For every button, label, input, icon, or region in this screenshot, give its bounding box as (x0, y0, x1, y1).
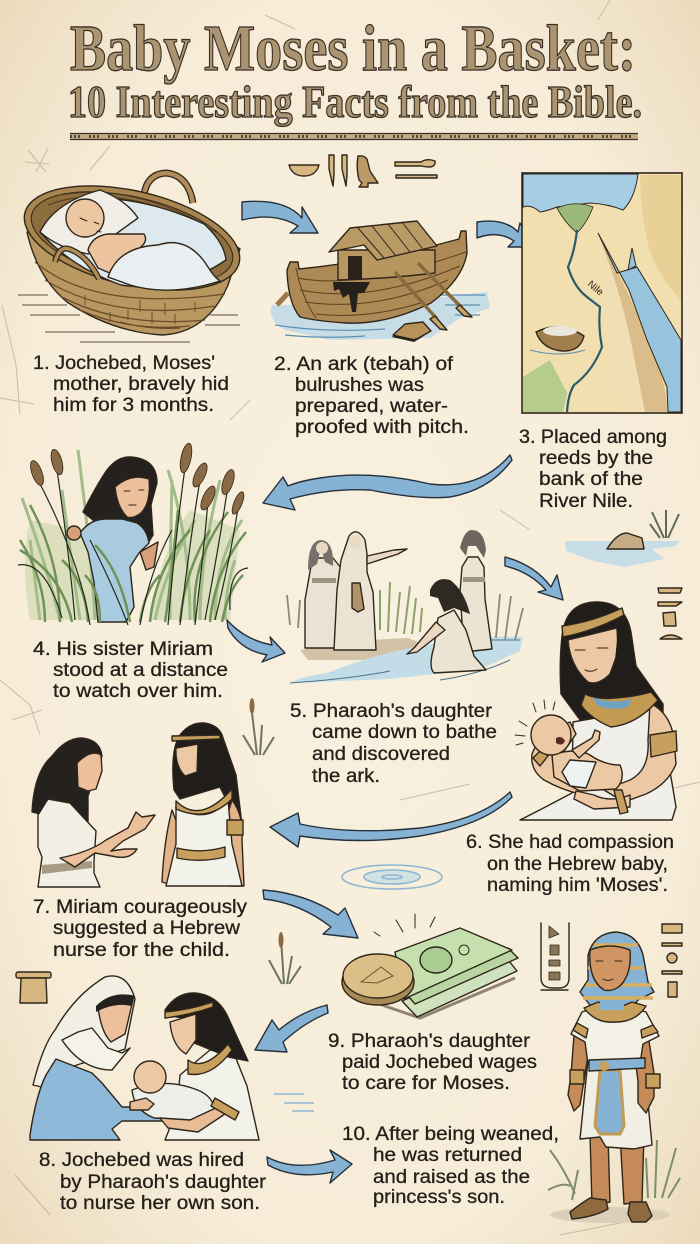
panel: Miriam and princess talking (32, 723, 244, 887)
caption 5: 5. Pharaoh's daughter (290, 701, 493, 722)
baby wrap (562, 760, 596, 788)
icon: temple glyph (16, 972, 51, 1003)
caption 9 (328, 1031, 537, 1094)
back oar (277, 293, 288, 305)
bracelet left (533, 750, 548, 766)
rays (374, 914, 435, 936)
panel: map of the Nile (522, 173, 682, 413)
bracelet right (614, 790, 628, 814)
arrow 6 to 7 (270, 792, 512, 847)
cry marks (515, 700, 555, 745)
long arrow 3 to 4 (263, 455, 512, 510)
headband (172, 735, 220, 741)
caption 8: by Pharaoh's daughter (60, 1172, 267, 1193)
caption 10: he was returned (373, 1145, 522, 1166)
caption 8 (39, 1150, 267, 1214)
caption 3: bank of the (539, 469, 643, 490)
headband (562, 608, 624, 637)
baby raised arm (572, 730, 600, 758)
sleeve trim (573, 1023, 658, 1038)
caption 1: him for 3 months. (53, 395, 214, 416)
caption 10: 10. After being weaned, (342, 1124, 559, 1145)
river Nile (567, 230, 602, 412)
collar (188, 1044, 232, 1074)
ground (550, 1207, 670, 1223)
map sheet (522, 173, 682, 413)
caption 9: paid Jochebed wages (342, 1052, 537, 1073)
arm band (650, 731, 677, 757)
ark hull (287, 231, 467, 323)
arrow 7 to 9 (263, 890, 358, 938)
baby head (134, 1061, 166, 1093)
caption 1: mother, bravely hid (53, 374, 229, 395)
arrow 9 to 8 (255, 1005, 328, 1052)
reed mass tint (25, 510, 240, 620)
blades back (22, 450, 242, 620)
panel: map of the Nile: Nile (585, 279, 606, 299)
belt (177, 847, 225, 860)
legs (590, 1135, 644, 1205)
caption 7: suggested a Hebrew (53, 918, 240, 939)
princess face (176, 744, 198, 776)
green land (523, 360, 567, 412)
baby body (552, 751, 622, 791)
pillow (40, 190, 138, 254)
forearm (574, 791, 630, 809)
cattails (28, 442, 246, 516)
princess dress (165, 1050, 259, 1140)
panel: basket with baby (14, 167, 250, 342)
icon: cartouche (541, 923, 569, 990)
Miriam tunic (38, 799, 100, 887)
small reed tuft (243, 698, 274, 755)
left arm (532, 722, 588, 794)
caption tuft (269, 932, 301, 984)
panel: young Moses (548, 932, 680, 1223)
dress (520, 707, 676, 820)
hieroglyphs right of princess (658, 588, 682, 639)
Miriam face (77, 753, 102, 791)
back reeds grey (287, 594, 523, 640)
basket rim (14, 167, 250, 309)
thatched roof (329, 221, 437, 260)
caption 9: to care for Moses. (342, 1073, 510, 1094)
princess pointing (334, 532, 407, 650)
water ripples (342, 865, 442, 889)
hands (130, 1098, 228, 1132)
basket back handle (144, 173, 193, 203)
caption 8: 8. Jochebed was hired (39, 1150, 244, 1171)
caption 2: 2. An ark (tebah) of (274, 354, 454, 375)
nemes headdress (580, 932, 654, 1010)
hair (560, 602, 663, 724)
caption 6: on the Hebrew baby, (487, 854, 668, 875)
blue panel (595, 1070, 624, 1134)
panel: Pharaoh's daughter at river (287, 530, 523, 683)
caption 9: 9. Pharaoh's daughter (328, 1031, 531, 1052)
princess face (170, 1014, 196, 1054)
title (68, 12, 642, 127)
small reeds and stone (565, 510, 680, 567)
arrow 1 to 2 (242, 201, 318, 233)
icon: hieroglyph column (662, 924, 682, 997)
small basket on map (536, 327, 584, 351)
hair fringe (111, 461, 151, 485)
divider band (70, 133, 638, 140)
panel: coins and money (342, 914, 518, 1018)
caption 8: to nurse her own son. (60, 1193, 260, 1214)
caption 10 (342, 1124, 559, 1208)
shadow (345, 978, 515, 1018)
caption 5: and discovered (312, 744, 450, 765)
caption 2 (274, 354, 469, 438)
eastern desert shade (600, 240, 668, 412)
baby face (66, 199, 104, 237)
caption 4: stood at a distance (53, 660, 228, 681)
Jochebed hair and face (98, 998, 133, 1042)
arrow 5 to 6 (505, 557, 563, 600)
arms (568, 1035, 654, 1113)
arrow 2 to 3 (477, 221, 535, 247)
arrow 4 to 5 (227, 620, 285, 662)
caption 7 (33, 897, 248, 961)
fringe and hair right (564, 618, 624, 670)
caption 5 (290, 701, 497, 787)
princess dress (166, 800, 242, 886)
sleeve trim (211, 1098, 239, 1120)
panel: Miriam among reeds (18, 442, 248, 625)
green reeds (370, 582, 422, 634)
headband (165, 1002, 213, 1018)
coin (342, 959, 414, 1005)
hut walls (338, 250, 435, 280)
Jochebed robe (30, 1059, 162, 1140)
water (271, 292, 490, 340)
maid right (460, 530, 492, 652)
Miriam arms and hands (60, 812, 155, 867)
arm band (227, 820, 243, 835)
river (290, 637, 523, 683)
dress (80, 519, 149, 622)
kilt (580, 1060, 652, 1149)
baby body (88, 234, 146, 274)
caption 1 (33, 353, 229, 416)
face (568, 628, 618, 683)
caption 2: proofed with pitch. (295, 417, 469, 438)
caption 5: the ark. (312, 766, 380, 787)
panel: ark of bulrushes (271, 221, 490, 342)
face (590, 946, 630, 990)
arrow 8 to 10 (267, 1150, 352, 1183)
Jochebed veil back (33, 976, 135, 1089)
caption 3 (519, 427, 667, 512)
caption 10: princess's son. (373, 1187, 505, 1208)
bill lower (402, 956, 517, 1017)
caption 1: 1. Jochebed, Moses' (33, 353, 215, 374)
right arm (604, 703, 676, 802)
bill top (395, 928, 512, 999)
hand left (67, 526, 81, 540)
sandals (570, 1198, 652, 1222)
collar (581, 692, 658, 727)
weave (35, 262, 225, 328)
shadow hatching (18, 295, 240, 342)
reeds (548, 1140, 680, 1200)
caption 4 (33, 639, 228, 702)
nile delta (557, 204, 593, 233)
basket inner wall (22, 175, 242, 301)
red sea (598, 233, 681, 412)
water (565, 541, 680, 567)
pitch (333, 282, 370, 312)
caption 3: River Nile. (539, 491, 633, 512)
collar (584, 1002, 646, 1022)
oars (395, 263, 462, 319)
blades front (20, 505, 246, 622)
caption 7: 7. Miriam courageously (33, 897, 248, 918)
caption 7: nurse for the child. (53, 940, 230, 961)
princess hair (165, 993, 248, 1061)
caption 2: prepared, water- (295, 396, 448, 417)
bedding (40, 198, 226, 287)
mediterranean sea (523, 174, 638, 212)
water ripple small (274, 1094, 314, 1111)
hand right (140, 542, 158, 570)
collar (176, 789, 232, 814)
caption 2: bulrushes was (295, 375, 424, 396)
princess arms (162, 800, 244, 886)
princess hair (173, 723, 242, 825)
stone in water (607, 533, 644, 549)
caption 10: and raised as the (373, 1167, 530, 1188)
caption 3: 3. Placed among (519, 427, 667, 448)
face (115, 477, 149, 518)
panel: Jochebed and princess with baby (30, 976, 259, 1140)
hair (83, 457, 157, 545)
panel: princess holding baby (515, 602, 677, 820)
caption 4: 4. His sister Miriam (33, 639, 213, 660)
caption 6 (466, 832, 674, 896)
Miriam hair (32, 738, 102, 826)
caption 4: to watch over him. (53, 681, 223, 702)
baby head (531, 715, 571, 755)
ground (300, 638, 428, 660)
maid left (305, 540, 347, 648)
pitch tablet (393, 322, 431, 340)
caption 6: 6. She had compassion (466, 832, 674, 853)
basket body (27, 209, 240, 335)
baby bundle (132, 1083, 214, 1120)
tunic (571, 1006, 659, 1064)
kneeling woman (407, 579, 486, 673)
front handle (55, 249, 99, 279)
belt (589, 1058, 645, 1071)
caption 3: reeds by the (539, 448, 653, 469)
caption 5: came down to bathe (312, 722, 497, 743)
caption 6: naming him 'Moses'. (487, 875, 668, 896)
blanket (108, 243, 220, 290)
icon: hieroglyph row (289, 155, 437, 187)
veil drape (62, 1028, 130, 1070)
